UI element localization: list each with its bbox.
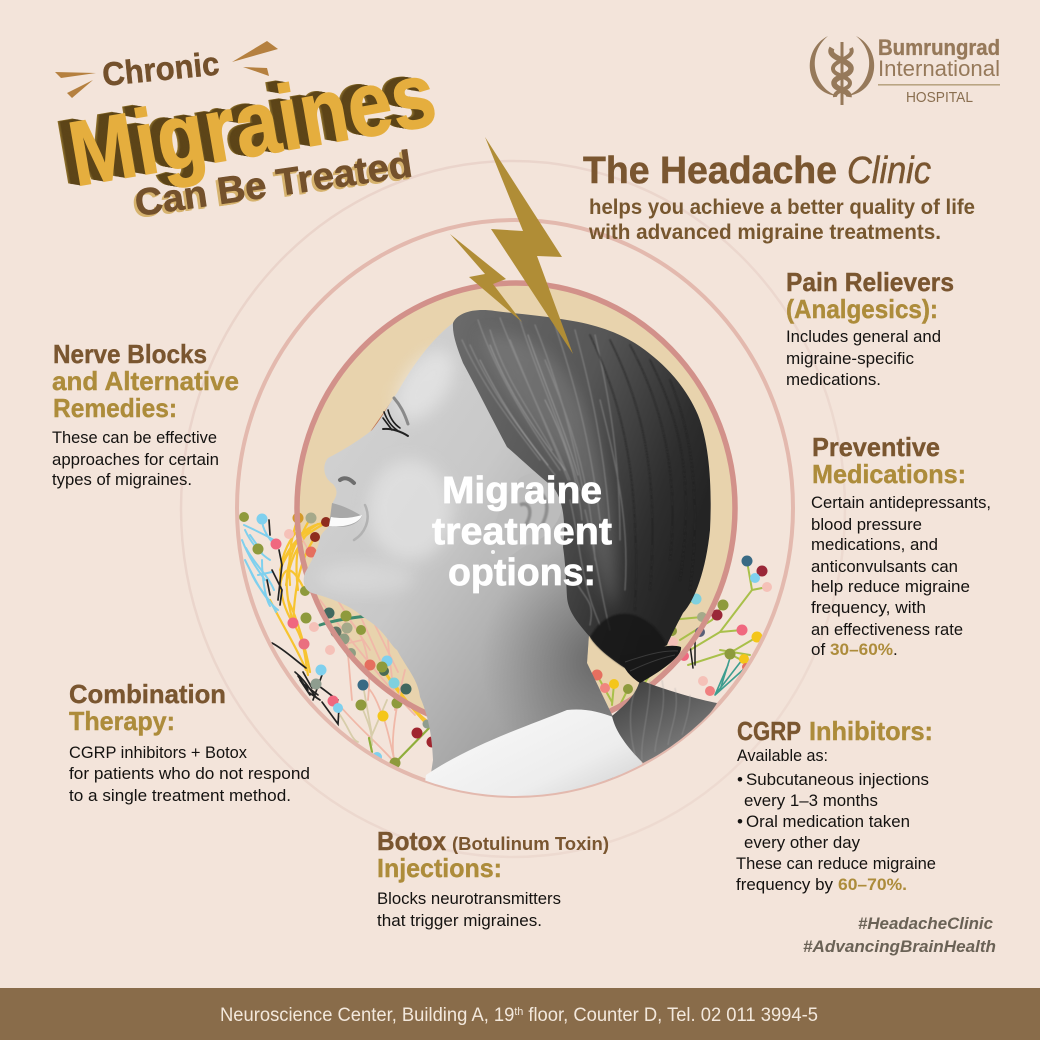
panel: CGRP inhibitors: • xyxy=(737,812,743,831)
portrait: woman in profile xyxy=(304,310,717,820)
panel: combination therapy xyxy=(69,679,310,805)
panel: CGRP inhibitors xyxy=(736,716,936,894)
ponytail xyxy=(612,680,717,763)
inner ring xyxy=(297,283,735,733)
title xyxy=(58,43,443,225)
panel: CGRP inhibitors: These can reduce migraine xyxy=(736,854,936,873)
panel: nerve blocks: and Alternative xyxy=(52,366,239,396)
centre label: Migraine treatment options xyxy=(432,470,612,594)
centre label: Migraine treatment options: options: xyxy=(448,552,596,594)
title line: Chronic: Chronic xyxy=(101,45,221,93)
panel: combination therapy: for patients who do not respond xyxy=(69,764,310,783)
panel: preventive medications: frequency, with xyxy=(811,598,926,617)
panel: CGRP inhibitors: Oral medication taken xyxy=(746,812,910,831)
panel: preventive medications: Preventive xyxy=(812,432,940,462)
face and neck xyxy=(304,323,613,780)
panel: nerve blocks: These can be effective xyxy=(52,428,217,447)
lightning bolts xyxy=(450,137,573,354)
panel: botox injections: Botox xyxy=(377,826,446,856)
panel: preventive medications: blood pressure xyxy=(811,515,922,534)
intro heading: The Headache Clinic: The Headache xyxy=(583,150,837,192)
panel: preventive medications: of xyxy=(811,640,825,659)
logo: HOSPITAL xyxy=(906,89,973,106)
shirt xyxy=(425,710,642,796)
forehead highlight xyxy=(391,348,454,420)
hair tie xyxy=(620,646,681,683)
intro heading: The Headache Clinic xyxy=(583,150,975,244)
panel: preventive medications: anticonvulsants can xyxy=(811,557,958,576)
title line: Can Be Treated: Can Be Treated xyxy=(132,144,415,225)
intro heading: The Headache Clinic: Clinic xyxy=(847,150,931,192)
large bolt xyxy=(485,137,573,354)
intro subheading xyxy=(588,196,975,244)
lips and teeth xyxy=(329,503,362,527)
outer ring xyxy=(181,161,845,857)
panel: CGRP inhibitors: 60–70%. xyxy=(838,875,907,894)
middle ring xyxy=(237,220,793,796)
eye and brow xyxy=(340,398,408,540)
hashtags: #AdvancingBrainHealth xyxy=(803,937,996,956)
panel: CGRP inhibitors: Subcutaneous injections xyxy=(746,770,929,789)
panel: botox injections: Blocks neurotransmitters xyxy=(377,889,561,908)
centre label: Migraine treatment options: treatment xyxy=(432,511,612,553)
brow accent behind face xyxy=(370,404,390,432)
panel: preventive medications: an effectiveness rate xyxy=(811,620,963,639)
panel: botox injections: Injections: xyxy=(377,853,502,883)
logo: International xyxy=(878,56,1000,81)
panel: pain relievers: medications. xyxy=(786,370,881,389)
footer text: floor, Counter D, Tel. 02 011 3994-5 xyxy=(523,1005,818,1026)
hashtags: #HeadacheClinic xyxy=(858,914,994,933)
neck shading xyxy=(501,568,612,722)
panel: nerve blocks: types of migraines. xyxy=(52,470,192,489)
panel: preventive medications: Certain antidepressants, xyxy=(811,493,991,512)
panel: pain relievers xyxy=(786,267,954,389)
panel: botox injections xyxy=(377,826,609,930)
ponytail strands xyxy=(630,680,690,760)
hair light band xyxy=(480,334,616,610)
small bolt xyxy=(450,234,522,322)
panel: CGRP inhibitors: every other day xyxy=(744,833,860,852)
footer text: th xyxy=(514,1006,523,1018)
panel: preventive medications: . xyxy=(893,640,898,659)
intro subheading: helps you achieve a better quality of life xyxy=(589,196,975,219)
footer text: Neuroscience Center, Building A, 19 xyxy=(220,1005,524,1026)
panel: combination therapy: to a single treatment method. xyxy=(69,786,291,805)
inner disc xyxy=(297,283,735,733)
panel: nerve blocks: Remedies: xyxy=(53,393,177,423)
panel: nerve blocks: Nerve Blocks xyxy=(53,339,207,369)
logo xyxy=(810,35,1000,106)
panel: preventive medications: 30–60% xyxy=(830,640,893,659)
panel: CGRP inhibitors: Inhibitors: xyxy=(809,716,933,746)
panel: pain relievers: Pain Relievers xyxy=(786,267,954,297)
panel: pain relievers: (Analgesics): xyxy=(786,294,938,324)
panel: combination therapy: Therapy: xyxy=(69,706,175,736)
logo wordmark: Bumrungrad xyxy=(878,35,1000,60)
hair mass xyxy=(453,310,711,668)
panel: preventive medications: medications, and xyxy=(811,535,938,554)
panel: preventive medications xyxy=(811,432,991,659)
centre label: Migraine treatment options: Migraine xyxy=(442,470,602,512)
flower dots xyxy=(239,512,772,768)
panel: nerve blocks xyxy=(52,339,239,489)
hair dark shadow at nape xyxy=(590,614,667,668)
intro subheading: with advanced migraine treatments. xyxy=(588,221,941,244)
panel: pain relievers: Includes general and xyxy=(786,327,941,346)
panel: preventive medications: help reduce migraine xyxy=(811,577,970,596)
panel: CGRP inhibitors: every 1–3 months xyxy=(744,791,878,810)
ear xyxy=(491,488,562,554)
hair strands xyxy=(462,318,695,630)
panel: nerve blocks: approaches for certain xyxy=(52,450,219,469)
title decorative rays xyxy=(55,41,278,98)
panel: CGRP inhibitors: Available as: xyxy=(737,746,828,765)
panel: CGRP inhibitors: • xyxy=(737,770,743,789)
logo emblem xyxy=(810,36,874,105)
jaw highlight xyxy=(328,566,404,590)
title line: Migraines: Migraines xyxy=(62,43,443,206)
panel: combination therapy: CGRP inhibitors + Botox xyxy=(69,743,247,762)
panel: preventive medications: Medications: xyxy=(812,459,966,489)
panel: CGRP inhibitors: frequency by xyxy=(736,875,833,894)
panel: combination therapy: Combination xyxy=(69,679,226,709)
footer band xyxy=(0,988,1040,1040)
panel: botox injections: (Botulinum Toxin) xyxy=(452,833,609,854)
cheek highlight xyxy=(368,460,452,560)
floral illustration: branches xyxy=(242,518,767,763)
panel: CGRP inhibitors: CGRP xyxy=(737,716,801,746)
panel: botox injections: that trigger migraines. xyxy=(377,911,542,930)
hashtags xyxy=(803,914,996,956)
panel: pain relievers: migraine-specific xyxy=(786,349,914,368)
